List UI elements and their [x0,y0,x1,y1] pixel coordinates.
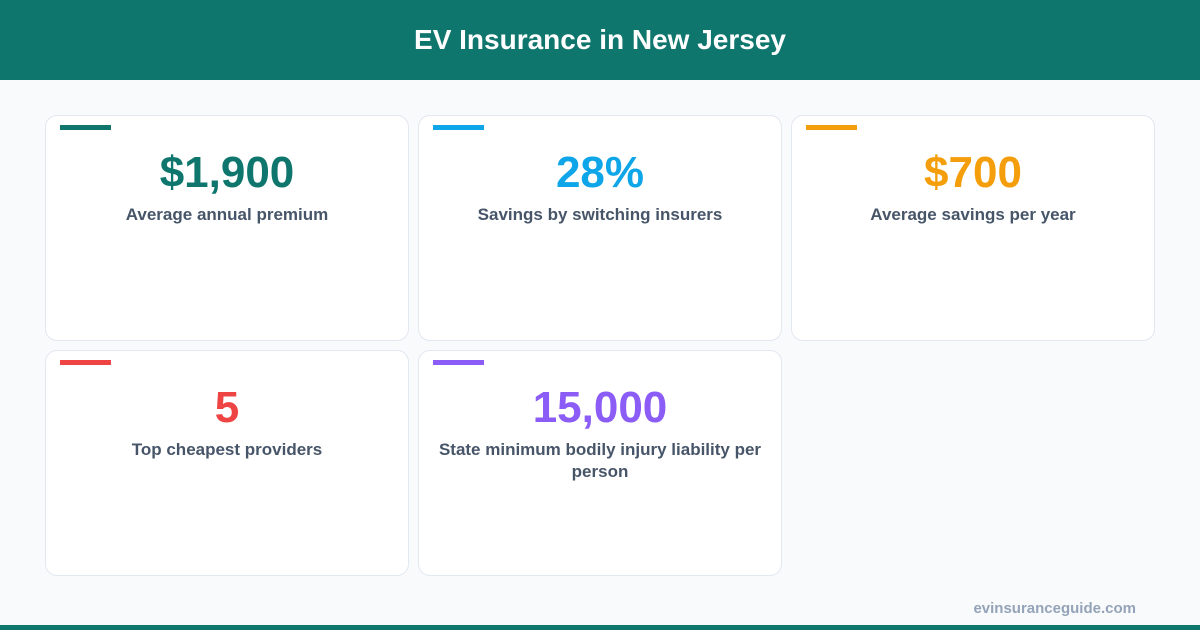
label: savings: Savings by switching insurers [478,205,722,224]
stat: 15,000: 15,000 [533,383,667,432]
label: liability: State minimum bodily injury liability per person [439,440,761,481]
stat: $1,900: $1,900 [160,148,294,197]
stat: 5: 5 [215,383,239,432]
stat: $700: $700 [924,148,1022,197]
panel: cheapest providers [45,350,409,576]
panel: liability minimum [418,350,782,576]
label: savings per year: Average savings per year [870,205,1076,224]
panel: savings switching [418,115,782,341]
footer url: evinsuranceguide.com [973,600,1136,617]
title: EV Insurance in New Jersey [414,24,786,55]
panel: average savings [791,115,1155,341]
title [0,0,1200,80]
label: providers: Top cheapest providers [132,440,322,459]
panel: average annual premium [45,115,409,341]
stat: 28%: 28% [556,148,644,197]
label: premium: Average annual premium [126,205,328,224]
